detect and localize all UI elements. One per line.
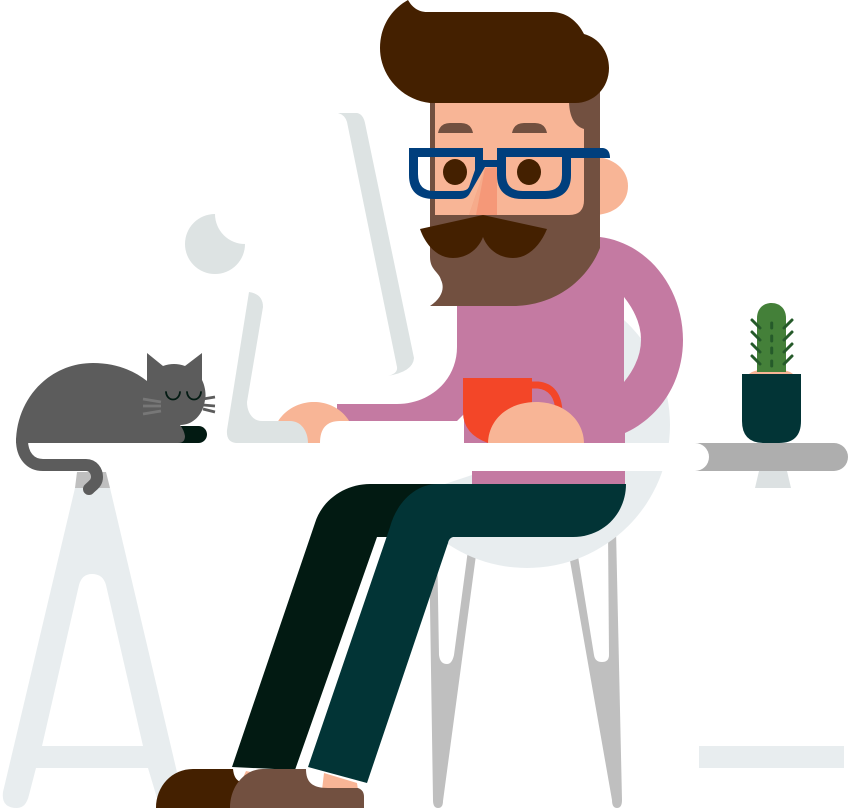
nose xyxy=(469,167,497,215)
front hand xyxy=(488,402,584,444)
cat whiskers xyxy=(203,397,215,412)
monitor logo xyxy=(185,214,245,274)
ear xyxy=(593,157,628,215)
desk right end xyxy=(680,443,848,471)
back shoe xyxy=(156,769,270,808)
front trouser leg xyxy=(308,484,626,783)
front sock xyxy=(322,773,358,790)
sweater torso xyxy=(457,237,683,484)
beard and head base xyxy=(430,90,600,306)
eyes xyxy=(443,159,541,185)
cat paw xyxy=(170,426,207,443)
soil xyxy=(748,369,794,383)
cactus spines xyxy=(752,320,792,366)
cat xyxy=(16,353,215,489)
cactus body xyxy=(757,303,786,372)
monitor xyxy=(185,113,414,376)
keyboard xyxy=(320,414,495,450)
cat fur stripes xyxy=(143,399,161,414)
cat body xyxy=(16,353,206,443)
moustache xyxy=(420,215,547,258)
glasses xyxy=(409,148,610,199)
sweater sleeve xyxy=(337,300,464,421)
eyebrows xyxy=(438,123,547,133)
back hand xyxy=(272,402,355,443)
cactus xyxy=(742,303,801,443)
desk right trestle leg xyxy=(755,471,791,488)
hair xyxy=(380,0,609,103)
coffee mug xyxy=(463,378,559,443)
chair xyxy=(430,320,670,808)
monitor stand xyxy=(227,292,308,443)
chair seat xyxy=(446,320,670,568)
sideburn xyxy=(569,100,590,129)
plant pot xyxy=(742,374,801,443)
desk top xyxy=(0,443,709,471)
cat closed eyes xyxy=(166,392,201,400)
floor block xyxy=(699,746,844,768)
monitor screen edge xyxy=(338,113,414,376)
front shoe xyxy=(230,769,364,808)
back trouser leg xyxy=(232,484,470,770)
cat tail xyxy=(22,440,97,489)
desk left trestle leg xyxy=(3,472,180,808)
chair legs xyxy=(429,530,622,808)
man xyxy=(156,0,683,808)
face skin xyxy=(435,100,584,215)
